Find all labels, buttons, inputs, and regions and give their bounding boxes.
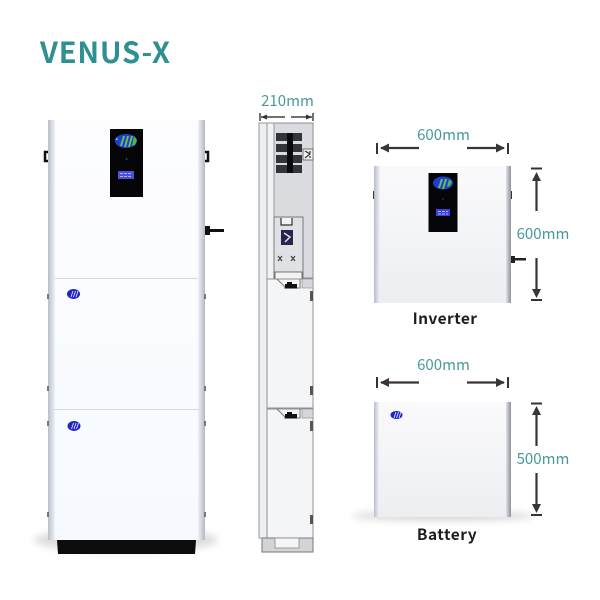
bottom foot: [262, 538, 313, 552]
battery badge: [390, 411, 402, 419]
module seam 1: [55, 278, 198, 279]
battery left edge: [374, 402, 379, 517]
inverter left handle: [373, 191, 375, 199]
left edge: [48, 120, 55, 540]
upper battery latch: [277, 279, 313, 288]
connector bay: [274, 217, 303, 279]
brand badge upper battery: [67, 289, 80, 299]
inverter height dimension: [517, 168, 569, 300]
brand badge lower battery: [68, 421, 80, 431]
inverter connector: [510, 256, 526, 263]
inverter height dimension: 600mm: [517, 223, 569, 244]
inverter section: [259, 123, 313, 278]
product: battery: [351, 354, 569, 545]
cable connector: [205, 226, 224, 235]
heat sink vents: [276, 133, 302, 173]
right handle: [205, 152, 208, 161]
module seam 2: [54, 409, 199, 410]
inverter width dimension: 600mm: [417, 124, 470, 145]
inverter display: [428, 173, 458, 232]
battery shadow: [351, 512, 535, 520]
battery height dimension: [517, 404, 569, 515]
lower battery latch: [277, 409, 313, 418]
battery width dimension: [377, 354, 508, 388]
right edge: [198, 120, 205, 540]
product: full tower front view: [34, 120, 224, 554]
inverter left edge: [374, 166, 380, 303]
side clips: [310, 291, 313, 524]
inverter right edge: [506, 166, 511, 303]
battery height dimension: 500mm: [517, 448, 569, 469]
outer rail: [259, 123, 267, 538]
inverter right handle: [510, 191, 512, 199]
inverter label: Inverter: [413, 307, 477, 329]
base plinth: [57, 540, 196, 554]
product: inverter: [373, 124, 569, 329]
inverter width dimension: [377, 124, 508, 154]
floor shadow: [34, 528, 218, 552]
upper battery section: [267, 279, 313, 408]
display panel: [110, 129, 143, 197]
side screws: [47, 294, 206, 517]
title: VENUS-X: [39, 30, 171, 72]
left handle: [45, 152, 48, 161]
lower battery section: [267, 409, 313, 538]
battery right edge: [506, 402, 511, 517]
dimension: 210mm: [260, 90, 314, 121]
dimension: 210mm: 210mm: [261, 90, 314, 111]
battery label: Battery: [417, 523, 477, 545]
battery body: [374, 402, 511, 517]
inverter body: [374, 166, 511, 303]
tower body: [48, 120, 205, 540]
side ports: [303, 149, 313, 160]
inner rail: [267, 123, 274, 279]
product: side view drawing: [259, 90, 314, 552]
battery width dimension: 600mm: [417, 354, 470, 375]
